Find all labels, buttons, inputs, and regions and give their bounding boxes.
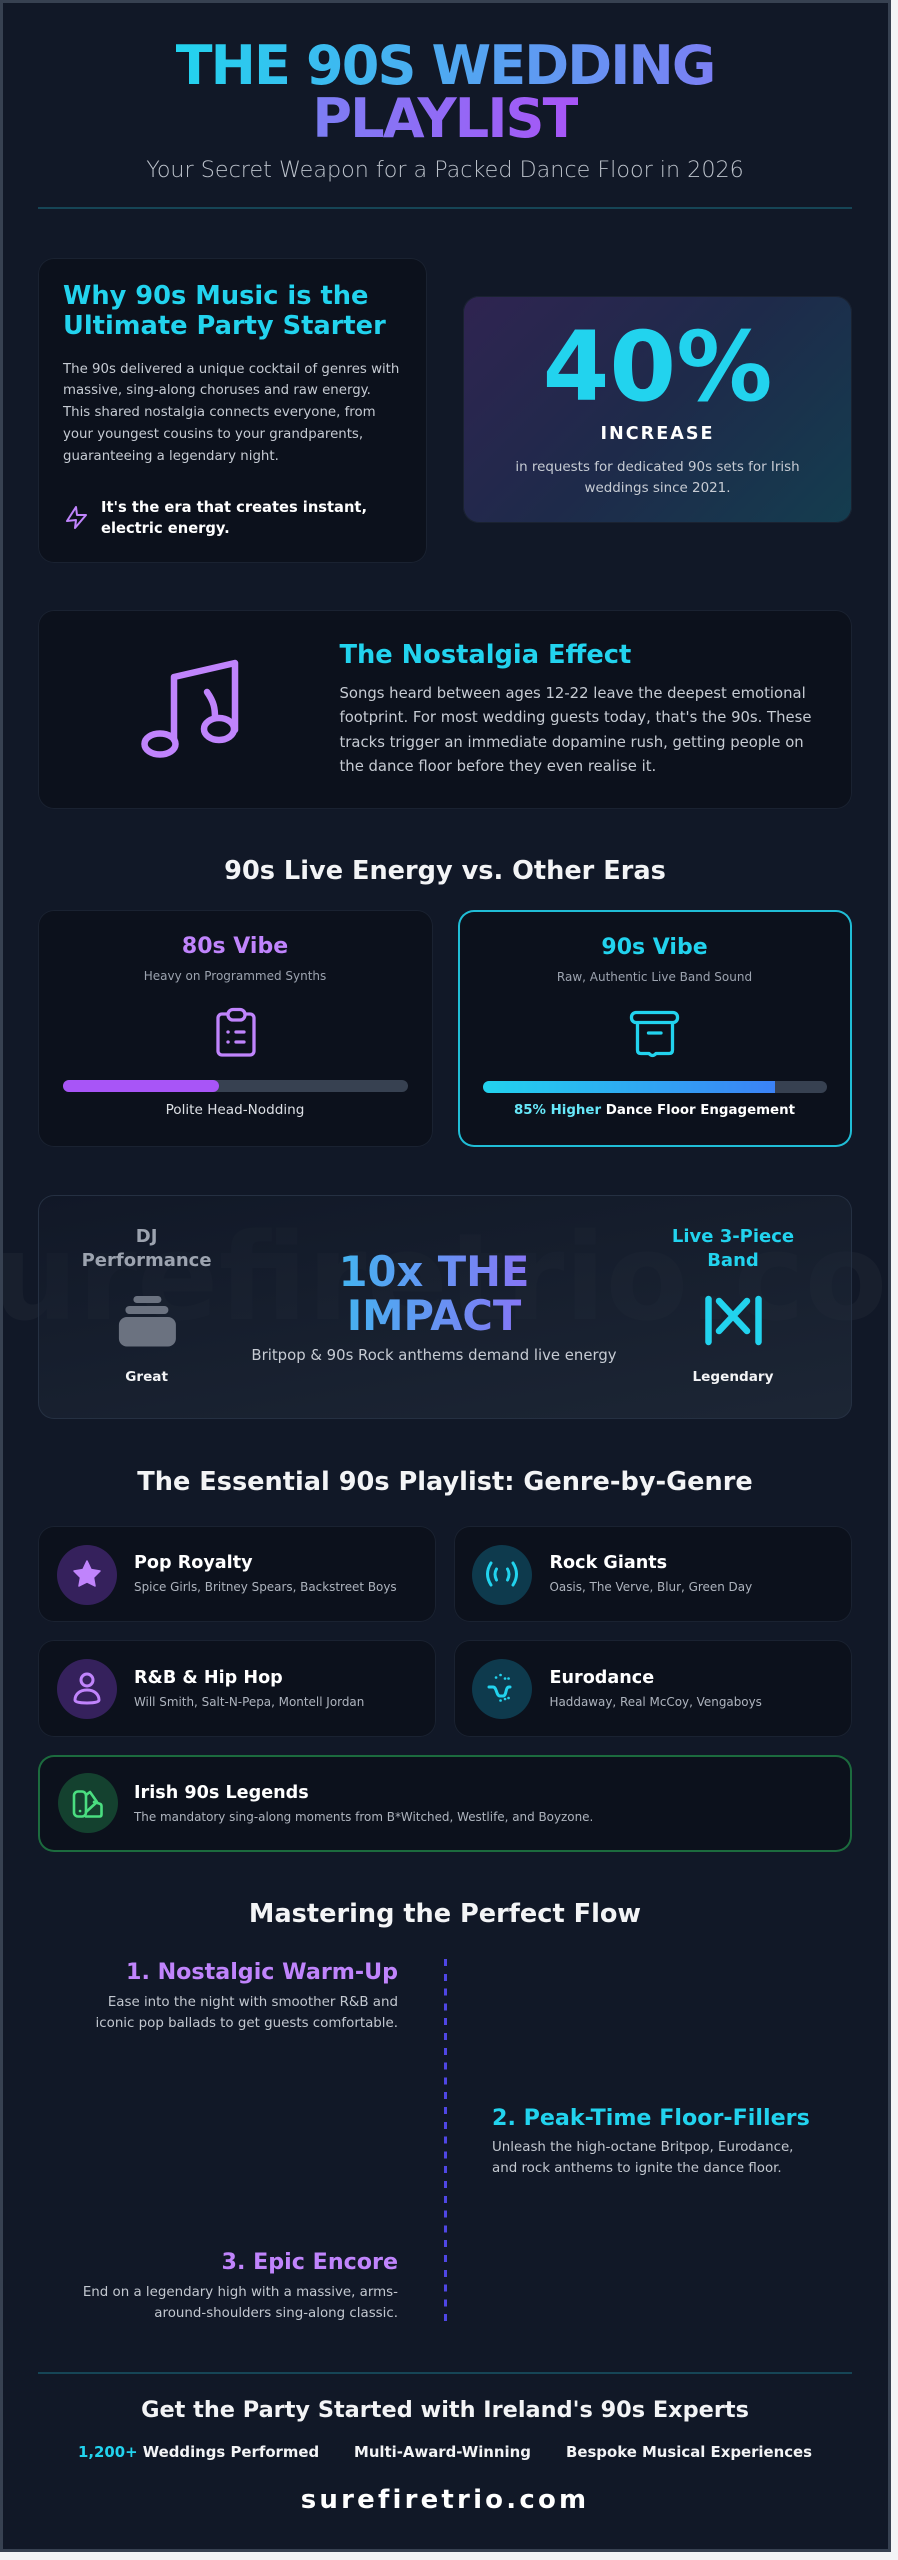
label: INCREASE [600, 424, 715, 444]
icon: speaker box [630, 1010, 680, 1058]
bar label: Polite Head-Nodding [166, 1102, 304, 1118]
step 1 title: 1. Nostalgic Warm-Up [126, 1959, 398, 1985]
step 2 text: and rock anthems to ignite the dance floor. [492, 2161, 782, 2176]
card subtitle: Heavy on Programmed Synths [144, 969, 326, 983]
panel: 90s vibe [458, 910, 852, 1147]
icon: sound waves [472, 1545, 532, 1605]
card title: 90s Vibe [601, 935, 708, 960]
heading: Ultimate Party Starter [63, 311, 386, 341]
icon: clipboard [216, 1008, 256, 1057]
heading: The Nostalgia Effect [340, 640, 631, 670]
body text: The 90s delivered a unique cocktail of genres with [63, 362, 399, 376]
icon: lightning bolt [66, 506, 87, 529]
website url: surefiretrio.com [301, 2485, 589, 2515]
stat: bespoke: Bespoke Musical Experiences [566, 2443, 812, 2461]
panel: nostalgia effect [38, 610, 852, 809]
panel: rock giants [454, 1526, 852, 1622]
body text: your youngest cousins to your grandparents, [63, 427, 363, 442]
card title: 80s Vibe [182, 934, 288, 959]
genre artists: Will Smith, Salt-N-Pepa, Montell Jordan [134, 1695, 364, 1709]
body text: the dance floor before they even realise it. [340, 758, 656, 775]
band label: Live 3-Piece [672, 1226, 794, 1247]
panel: pop royalty [38, 1526, 436, 1622]
panel: 40% stat [463, 296, 852, 523]
band label: Band [707, 1250, 759, 1271]
step 1 text: iconic pop ballads to get guests comfortable. [96, 2016, 398, 2031]
bar: 80s engagement [63, 1080, 408, 1092]
body text [340, 685, 811, 775]
body text: footprint. For most wedding guests today, that's the 90s. These [340, 709, 811, 726]
column: live band [672, 1226, 794, 1385]
genre title: Irish 90s Legends [134, 1783, 309, 1803]
genre title: Rock Giants [550, 1553, 667, 1573]
heading: essential playlist: The Essential 90s Playlist: Genre-by-Genre [137, 1467, 753, 1497]
band rating: Legendary [692, 1369, 773, 1385]
description: in requests for dedicated 90s sets for Irish [515, 460, 800, 475]
DJ label: DJ [136, 1226, 157, 1247]
DJ rating: Great [125, 1369, 168, 1385]
genre title: Eurodance [550, 1668, 654, 1688]
icon: wave and dots [472, 1659, 532, 1719]
DJ label [82, 1226, 212, 1271]
bar: 90s engagement [482, 1081, 826, 1093]
footer heading: Get the Party Started with Ireland's 90s Experts [141, 2397, 749, 2423]
genre artists: Oasis, The Verve, Blur, Green Day [550, 1580, 752, 1594]
step 3 text: around-shoulders sing-along classic. [154, 2306, 398, 2321]
step 1 [96, 1959, 398, 2031]
icon: music notes [141, 660, 238, 758]
body text: tracks trigger an immediate dopamine rush, getting people on [340, 734, 804, 751]
step 3 text [83, 2285, 398, 2321]
heading [63, 281, 386, 341]
icon: DJ stack [118, 1296, 176, 1346]
genre artists: Spice Girls, Britney Spears, Backstreet Boys [134, 1580, 397, 1594]
step 1 text: Ease into the night with smoother R&B and [108, 1995, 398, 2010]
step 2 title: 2. Peak-Time Floor-Fillers [492, 2105, 810, 2131]
DJ label: Performance [82, 1250, 212, 1271]
panel: irish legends [38, 1755, 852, 1852]
heading: live energy: 90s Live Energy vs. Other Eras [224, 856, 666, 886]
impact heading: 10x THE [339, 1247, 529, 1296]
callout text: electric energy. [101, 520, 230, 536]
title: PLAYLIST [312, 87, 578, 150]
impact heading: IMPACT [347, 1291, 521, 1340]
step 1 text [96, 1995, 398, 2031]
title [176, 34, 714, 150]
icon: swatches [58, 1773, 118, 1833]
column: DJ performance [82, 1226, 212, 1385]
body text: Songs heard between ages 12-22 leave the deepest emotional [340, 685, 806, 702]
description [515, 460, 800, 496]
subtitle: Your Secret Weapon for a Packed Dance Floor in 2026 [146, 157, 744, 183]
panel: why 90s music [38, 258, 427, 563]
card subtitle: Raw, Authentic Live Band Sound [557, 970, 752, 984]
panel: eurodance [454, 1640, 852, 1737]
band label [672, 1226, 794, 1271]
panel: 10x impact [38, 1195, 852, 1419]
step 3 [83, 2249, 398, 2321]
stat: awards: Multi-Award-Winning [354, 2443, 531, 2461]
step 3 text: End on a legendary high with a massive, arms- [83, 2285, 398, 2300]
callout text [101, 498, 367, 536]
body text: massive, sing-along choruses and raw energy. [63, 383, 371, 398]
step 3 title: 3. Epic Encore [222, 2249, 398, 2275]
genre title: R&B & Hip Hop [134, 1668, 283, 1688]
icon: crossed bars [705, 1296, 762, 1346]
panel: 80s vibe [38, 910, 433, 1147]
footer stats [78, 2443, 812, 2461]
heading: Why 90s Music is the [63, 281, 368, 311]
icon: person [57, 1659, 117, 1719]
genre title: Pop Royalty [134, 1553, 253, 1573]
genre artists: Haddaway, Real McCoy, Vengaboys [550, 1695, 762, 1709]
body text [62, 362, 399, 464]
big number: 40% [543, 311, 772, 423]
step 2 [492, 2105, 810, 2176]
genre description: The mandatory sing-along moments from B*Witched, Westlife, and Boyzone. [134, 1810, 593, 1824]
step 2 text [492, 2140, 793, 2176]
step 2 text: Unleash the high-octane Britpop, Eurodance, [492, 2140, 793, 2155]
body text: This shared nostalgia connects everyone, from [63, 405, 376, 420]
title: THE 90S WEDDING [176, 34, 714, 97]
heading: perfect flow: Mastering the Perfect Flow [249, 1899, 641, 1929]
stat: weddings: 1,200+ Weddings Performed [78, 2443, 319, 2461]
body text: guaranteeing a legendary night. [63, 449, 279, 464]
panel: r&b and hip hop [38, 1640, 436, 1737]
impact caption: Britpop & 90s Rock anthems demand live energy [251, 1346, 617, 1364]
bar label: 85% Higher Dance Floor Engagement [514, 1103, 795, 1118]
impact heading [245, 1250, 623, 1338]
timeline: dashed line [444, 1959, 447, 2322]
callout text: It's the era that creates instant, [101, 498, 367, 516]
icon: star [57, 1545, 117, 1605]
description: weddings since 2021. [584, 481, 730, 496]
